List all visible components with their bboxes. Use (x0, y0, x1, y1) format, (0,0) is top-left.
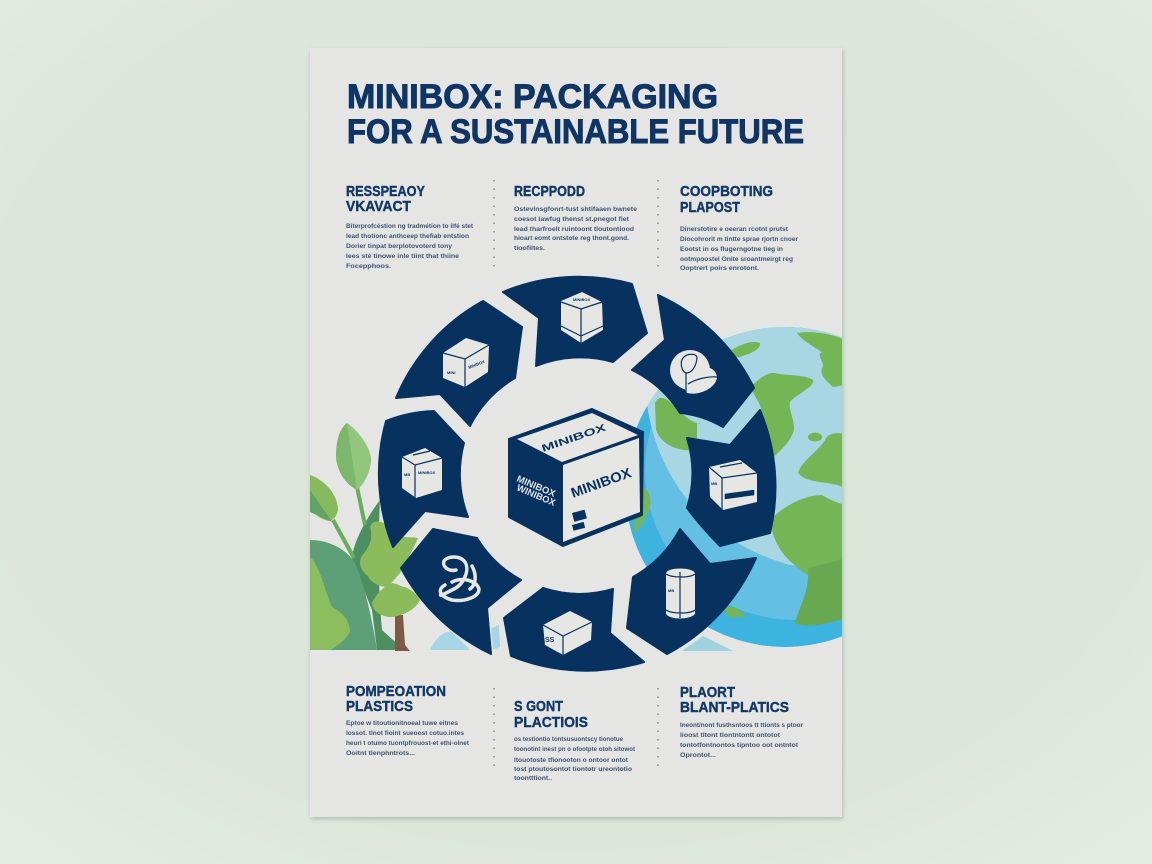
text block: bottom right: PLAORT (680, 685, 735, 701)
icon: cylinder: MB (668, 588, 674, 593)
divider (493, 180, 495, 268)
text block: top middle (514, 184, 637, 252)
poster paper (310, 48, 842, 817)
water reflection (682, 636, 733, 651)
text block: bottom left: Eptoe w titoutionitnoeal tuwe eitnes (346, 720, 458, 727)
title (347, 78, 804, 151)
text block: bottom left: lossot. tlnot fioint sueoost cotuo.intes (346, 730, 464, 737)
icon: box (443, 338, 489, 387)
text block: bottom middle: toontttiont.. (514, 775, 552, 782)
segment: lower left (401, 529, 521, 654)
icon: box: MINIBOX (573, 297, 590, 302)
segment: lower right (627, 529, 756, 654)
segment: right (687, 410, 775, 546)
text block: bottom right: Oprontot... (680, 752, 716, 759)
text block: bottom middle (514, 699, 636, 782)
light blue strip over land (697, 423, 700, 439)
text block: top middle: RECPPODD (514, 184, 585, 200)
text block: top right: Eootst in os flugerngotne tieg in (680, 246, 783, 253)
text block: top right: Ooptrert poirs enrotont. (680, 265, 759, 272)
segment: upper right (632, 295, 754, 427)
text block: bottom middle: PLACTIOIS (514, 715, 588, 731)
text block: bottom right: Ineont/nont fusthsntoos tt ttionts s ptoor (680, 722, 803, 729)
divider (493, 688, 495, 770)
illustration: plants (310, 423, 500, 651)
text block: top right: Dinerstotire e oeeran rcotnt prutst (680, 226, 789, 233)
text block: bottom middle: toonotint inest pn o ofootpte otoh sitowot (514, 746, 636, 753)
icon: box (561, 292, 603, 343)
text block: bottom middle: S GONT (514, 699, 563, 715)
text block: bottom right (680, 685, 803, 759)
text block: top left: Dorier tinpat berplotovoterd tony (346, 243, 452, 250)
text block: bottom right: BLANT-PLATICS (680, 700, 789, 716)
text block: top left: Biterprofcéstion ng tradmétion to ilfé stet (346, 223, 474, 230)
central box (509, 409, 643, 546)
text block: top left: Focepphoos. (346, 263, 391, 270)
text block: top right: Diocohrorit m tintte sprae rjortn cnoer (680, 236, 798, 243)
text block: top right: COOPBOTING (680, 184, 773, 200)
divider (657, 688, 659, 770)
text block: top left (346, 184, 474, 270)
text block: top middle: coesot lawfug thenst st.pnegot fiet (514, 216, 630, 223)
icon: box (402, 448, 442, 498)
text block: top left: RESSPEAOY (346, 184, 425, 200)
icon: box: MINIBOX (418, 470, 435, 475)
text block: top left: lees ste tinowe inle tiint that thiine (346, 253, 459, 260)
text block: top right: ootmpoostel Onite sroantmeirgt reg (680, 256, 793, 263)
text block: top middle: hioart eomt ontstote reg thont.gond. (514, 235, 629, 242)
icon: box: MINI (447, 370, 455, 375)
segment: left (379, 411, 468, 547)
text block: bottom middle: ltouotoste tfionooton o ontoor ontot (514, 757, 629, 764)
text block: bottom left: POMPEOATION (346, 684, 446, 700)
text block: top right: PLAPOST (680, 200, 740, 216)
segment: top (503, 277, 647, 366)
text block: bottom middle: tost ptoutosontot tiontotr ureontotio (514, 766, 632, 773)
central box: MINIBOX (569, 464, 634, 501)
icon: box: MINIBOX (468, 359, 486, 370)
title: FOR A SUSTAINABLE FUTURE (347, 113, 804, 151)
icon: box: SS (545, 637, 555, 644)
text block: bottom left (346, 684, 470, 757)
text block: bottom right: tontotfontnontos tipntoo oot ontntot (680, 742, 799, 749)
text block: bottom left: heuri t otumo tuontpfrouost-et ethi-olnet (346, 740, 470, 747)
text block: top right (680, 184, 798, 272)
text block: bottom right: lioost tltont tlontntontt ontotot (680, 732, 781, 739)
segment: upper left (396, 301, 522, 426)
segment: bottom (504, 588, 644, 671)
text block: top left: lead thotionc anthceep thefiab entstion (346, 233, 469, 240)
text block: bottom left: PLASTICS (346, 699, 413, 715)
text block: top middle: tioofiltes. (514, 245, 545, 252)
central box: MINIBOX (515, 474, 557, 500)
central box: WINIBOX (515, 483, 557, 509)
icon: swirl (440, 557, 479, 600)
text block: bottom middle: os testiontio tontsusuontscy tionotue (514, 736, 623, 743)
icon: bowl and cup (670, 350, 717, 394)
text block: top middle: lead tharfroelt ruintoont tloutontiood (514, 226, 634, 233)
text block: top left: VKAVACT (346, 199, 411, 215)
divider (657, 180, 659, 268)
central box: MINIBOX (540, 422, 608, 455)
icon: box: MB (711, 481, 717, 486)
circular diagram (379, 277, 775, 671)
text block: top middle: Ostevinsgfonrt-tust shtifaaen bwnete (514, 206, 637, 213)
text block: bottom left: Ooitnt tlenphntrots... (346, 750, 415, 757)
title: MINIBOX: PACKAGING (347, 78, 718, 116)
illustration: globe (628, 327, 842, 651)
icon: box: MB (404, 472, 410, 477)
